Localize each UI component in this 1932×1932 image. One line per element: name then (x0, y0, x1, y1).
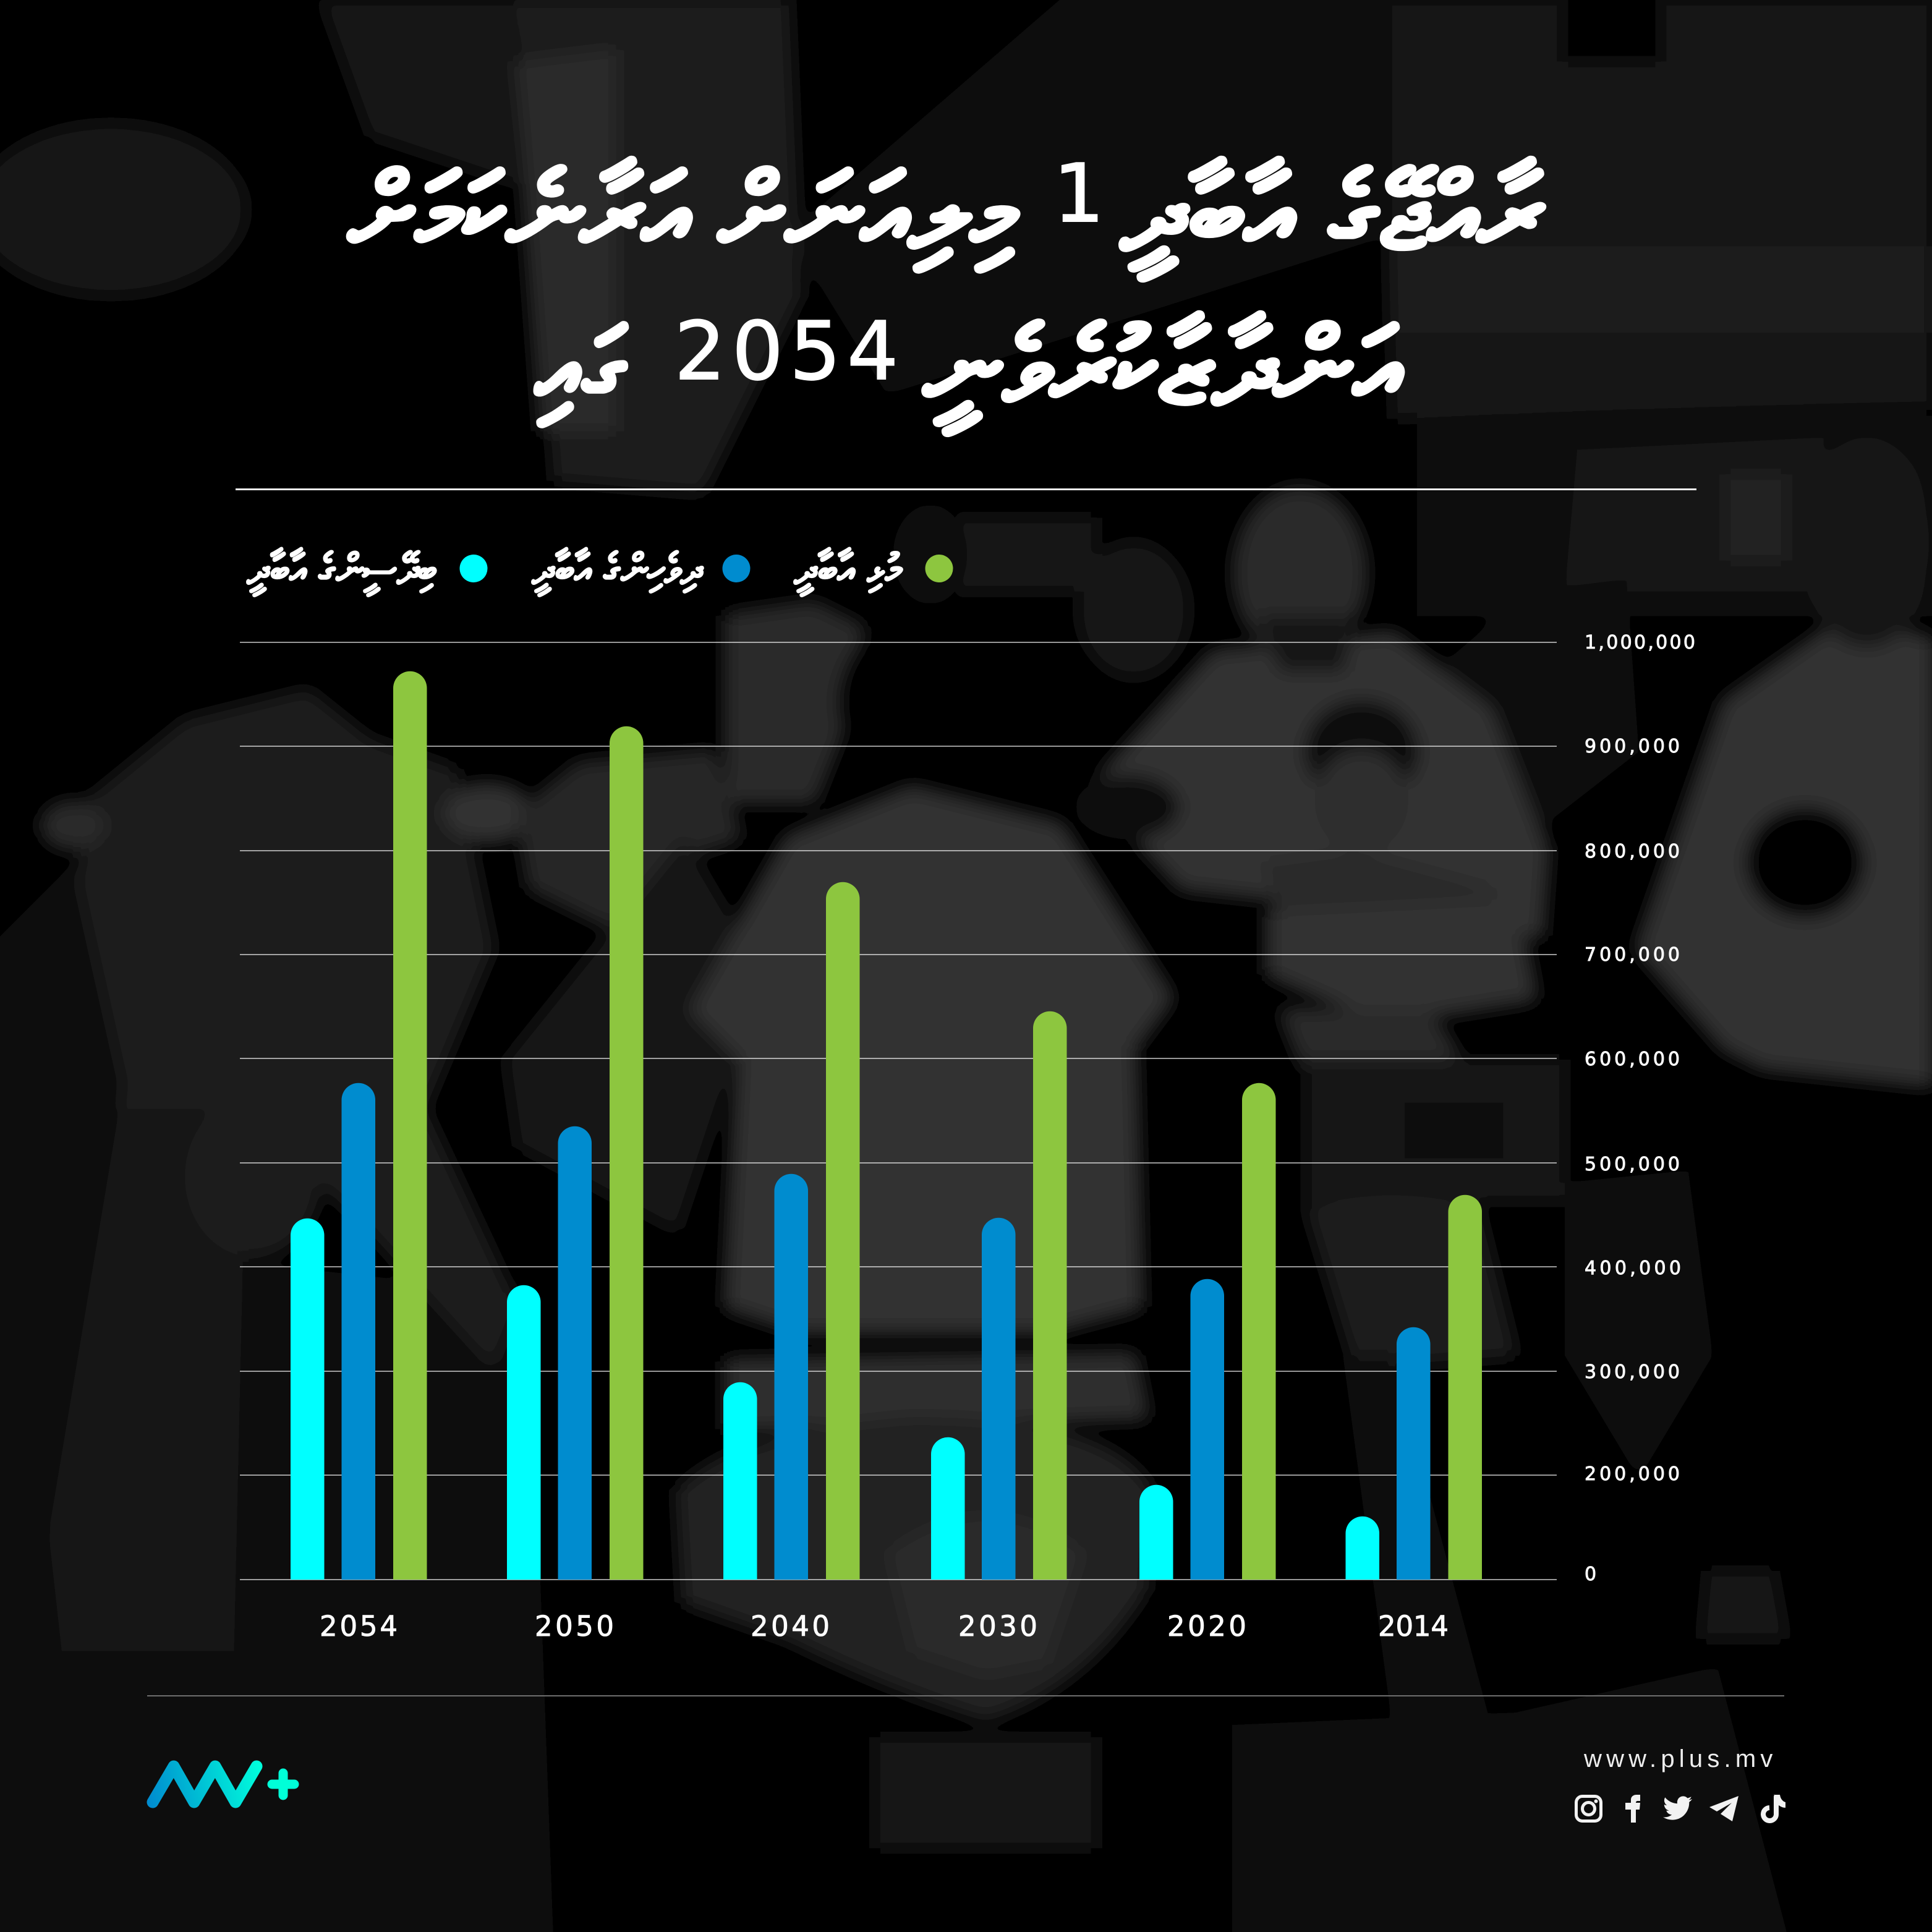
icon: twitter (1663, 1796, 1692, 1820)
y axis labels: 900,000 (1585, 736, 1680, 757)
y axis labels: 400,000 (1585, 1258, 1681, 1279)
bars 2050 (507, 726, 643, 1580)
title number 1: 1 (1053, 147, 1104, 240)
logo mark (153, 1766, 257, 1802)
legend: foreign population: ބިދޭސީންގެ އާބާދީ (246, 546, 437, 597)
title year: 2054 (674, 304, 898, 398)
title line 2 right: އަންދާޒާކުރެވެނީ (922, 309, 1405, 436)
y axis labels: 1,000,000 (1585, 632, 1695, 653)
title line 2 left: ގައި (534, 309, 628, 427)
x axis labels: 2020 (1167, 1610, 1246, 1643)
legend (246, 546, 953, 597)
y axis labels: 600,000 (1585, 1049, 1680, 1070)
title (347, 147, 1546, 436)
icon: telegram (1709, 1796, 1738, 1821)
bars 2014 (1345, 1195, 1482, 1580)
website: www.plus.mv (1583, 1745, 1777, 1772)
x axis labels: 2050 (535, 1610, 614, 1643)
y axis labels: 500,000 (1585, 1154, 1680, 1175)
y axis labels: 200,000 (1585, 1463, 1680, 1485)
legend: Maldivian population: ދިވެހިންގެ އާބާދީ (531, 546, 704, 597)
title line 1 left: މިލިއަނަށް އަރާނެކަމަށް (347, 154, 1019, 273)
y axis labels: 0 (1585, 1564, 1596, 1585)
logo plus (272, 1773, 294, 1795)
icon: facebook (1625, 1795, 1640, 1823)
y axis labels (1585, 632, 1695, 1585)
icon: tiktok (1763, 1795, 1785, 1821)
bars 2030 (931, 1011, 1067, 1580)
footer divider (147, 1695, 1784, 1696)
social icons (1577, 1795, 1785, 1823)
legend: total population (793, 546, 953, 597)
x axis labels: 2040 (751, 1610, 830, 1643)
bars 2020 (1139, 1083, 1276, 1580)
x axis labels: 2054 (320, 1610, 398, 1643)
y axis labels: 700,000 (1585, 944, 1680, 966)
x axis labels: 2014 (1378, 1610, 1449, 1643)
bar chart (240, 632, 1695, 1643)
y axis labels: 800,000 (1585, 841, 1680, 862)
bars 2040 (723, 882, 859, 1580)
x axis labels: 2030 (958, 1610, 1037, 1643)
y axis labels: 300,000 (1585, 1361, 1680, 1383)
x axis labels (320, 1610, 1449, 1643)
icon: instagram (1577, 1797, 1601, 1821)
legend: total population: މުޅި އާބާދީ (793, 546, 903, 597)
bars 2054 (291, 671, 427, 1580)
title line 1 right: ރާއްޖޭގެ އާބާދީ (1119, 154, 1546, 281)
title divider (236, 488, 1696, 490)
logo (153, 1766, 294, 1802)
